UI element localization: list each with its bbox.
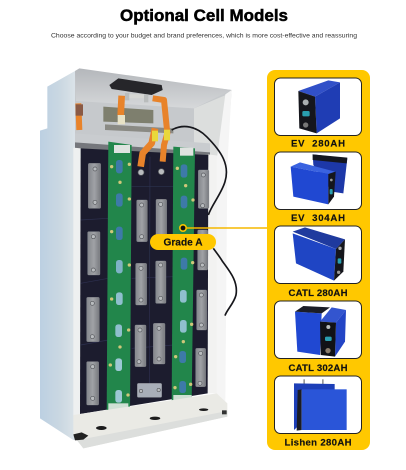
cell dividers — [81, 157, 173, 385]
card: EV 304AH — [274, 152, 362, 224]
card: CATL 302AH — [274, 301, 362, 374]
battery cabinet photo — [40, 68, 236, 448]
terminal posts — [125, 93, 148, 102]
cabinet base plate — [73, 393, 227, 448]
card: EV 280AH: EV 280AH — [291, 138, 345, 150]
card: CATL 280AH — [274, 226, 362, 299]
callout leader line — [180, 225, 267, 231]
callout: Grade A — [150, 234, 216, 250]
strap labels — [76, 104, 170, 141]
panel: cell models — [267, 70, 370, 450]
cabinet front frame — [73, 90, 232, 416]
cabinet left side panel — [40, 71, 75, 440]
subtitle: Choose according to your budget and brand preferences, which is more cost-effective and reassuring — [51, 32, 357, 40]
card: CATL 280AH: CATL 280AH — [288, 288, 348, 299]
orange copper straps — [78, 96, 167, 167]
black top bracket — [109, 78, 163, 95]
cabinet interior — [75, 68, 232, 160]
card: Lishen 280AH — [274, 376, 362, 448]
right green circuit board — [172, 147, 195, 403]
card: EV 280AH — [274, 78, 362, 150]
terminal bolts — [90, 167, 205, 400]
metal busbars — [87, 163, 209, 405]
left green circuit board — [107, 142, 132, 413]
black cable — [172, 127, 236, 316]
title: Optional Cell Models — [120, 6, 288, 25]
card: EV 304AH: EV 304AH — [291, 213, 345, 224]
dark battery cells — [80, 148, 208, 414]
card: Lishen 280AH: Lishen 280AH — [284, 438, 352, 448]
callout: Grade A: Grade A — [164, 238, 202, 248]
card: CATL 302AH: CATL 302AH — [288, 363, 348, 374]
